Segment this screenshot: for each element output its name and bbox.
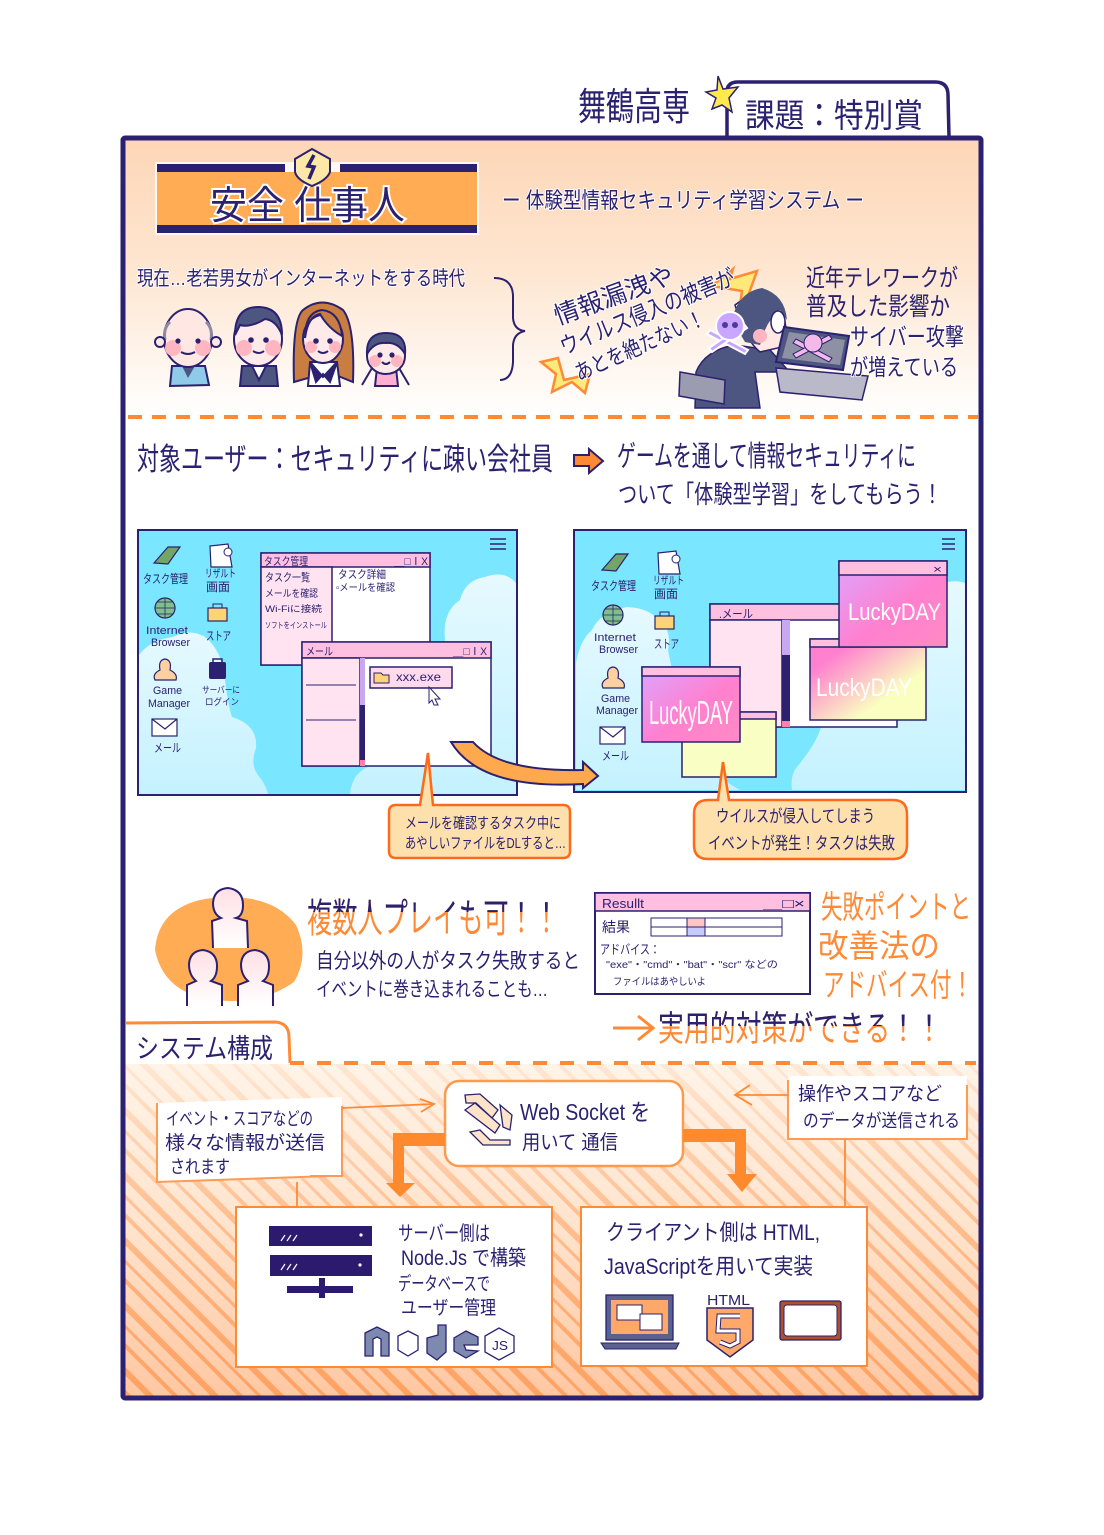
server text: サーバー側は xyxy=(398,1222,490,1245)
desktop icons xyxy=(591,551,684,763)
tab: award xyxy=(706,76,949,137)
body xyxy=(695,345,786,408)
desktop icons xyxy=(143,544,240,755)
panel: screen 1 xyxy=(138,530,517,795)
window: result: アドバイス： xyxy=(600,942,660,957)
main frame border xyxy=(123,138,981,1398)
popup: lucky day yellow xyxy=(682,712,776,777)
desktop icons: メール xyxy=(602,749,629,763)
window: mail: xxx.exe xyxy=(396,670,441,684)
arrow: websocket to server xyxy=(386,1133,445,1197)
title banner xyxy=(155,149,479,235)
icon: cursor xyxy=(429,687,440,705)
window: mail xyxy=(302,642,491,766)
text: multiplayer detail: 自分以外の人がタスク失敗すると xyxy=(316,950,580,973)
icon: bag xyxy=(655,616,674,629)
people illustration xyxy=(155,302,409,386)
callout 2: ウイルスが侵入してしまう xyxy=(716,807,875,826)
box: client note: 操作やスコアなど xyxy=(798,1083,942,1105)
box: event note: されます xyxy=(170,1157,230,1177)
arrow: to goal xyxy=(574,449,603,473)
desktop icons: Game xyxy=(153,685,182,697)
box: event note xyxy=(157,1097,342,1182)
popup: lucky day 3 xyxy=(642,667,740,742)
text: telework: 普及した影響か xyxy=(806,293,950,321)
icon: shield xyxy=(295,149,330,186)
icon: spark bottom xyxy=(541,358,590,393)
icon: server login xyxy=(209,662,226,679)
window: result: Resullt xyxy=(602,896,644,911)
child xyxy=(362,333,409,386)
text: goal: ゲームを通して情報セキュリティに xyxy=(617,440,916,473)
skull on screen xyxy=(793,334,832,362)
icon: spark top xyxy=(712,269,757,305)
window: task manager: ＿□ⅠX xyxy=(394,556,429,568)
desktop icons: Manager xyxy=(148,698,190,710)
icon: websocket xyxy=(465,1094,512,1145)
window: mail: .メール xyxy=(719,607,753,621)
heading: advice: 失敗ポイントと xyxy=(821,889,971,925)
menu icon xyxy=(490,539,506,549)
popup: lucky day 1: × xyxy=(933,564,942,576)
popup: lucky day 1: LuckyDAY xyxy=(848,599,941,626)
desktop icons: リザルト xyxy=(653,574,684,587)
header: school name: 舞鶴高専 xyxy=(578,87,690,129)
server text: データベースで xyxy=(398,1273,490,1295)
window: result: ファイルはあやしいよ xyxy=(613,976,706,988)
window: result xyxy=(595,893,810,994)
desktop icons: Browser xyxy=(599,644,638,656)
head xyxy=(735,295,786,352)
window: mail: メール xyxy=(306,646,333,658)
slanted warning text xyxy=(550,262,739,386)
icon: globe xyxy=(155,598,175,618)
callout 2 xyxy=(694,762,907,859)
illustration: hacker xyxy=(679,269,868,408)
divider dashed xyxy=(290,1061,976,1065)
popup: lucky day 1 xyxy=(839,561,947,647)
client text xyxy=(604,1220,820,1279)
old man xyxy=(155,309,221,386)
box: client note: のデータが送信される xyxy=(803,1111,960,1131)
text: multiplayer detail xyxy=(316,950,580,1001)
arrow: client note to websocket xyxy=(735,1085,788,1105)
heading: multiplayer xyxy=(308,898,548,936)
arrow: websocket to client xyxy=(683,1129,757,1192)
server text: Node.Js で構築 xyxy=(401,1247,526,1270)
icon: book xyxy=(154,547,180,564)
icon: mail xyxy=(152,719,177,736)
popup: lucky day 2 xyxy=(810,639,926,720)
box: websocket: 用いて 通信 xyxy=(522,1131,618,1154)
section tab: system xyxy=(126,1022,290,1064)
text: target users: 対象ユーザー：セキュリティに疎い会社員 xyxy=(137,442,553,477)
text: telework: サイバー攻撃 xyxy=(850,324,964,351)
menu icon xyxy=(942,539,955,549)
desktop icons: Internet xyxy=(146,625,188,637)
window: result: 結果 xyxy=(602,919,630,935)
panel: screen 2 xyxy=(574,530,966,792)
icon: user xyxy=(154,659,176,680)
callout 1: メールを確認するタスク中に xyxy=(405,815,561,832)
desktop icons: メール xyxy=(154,741,181,755)
window: task manager: Wi-Fiに接続 xyxy=(265,603,322,614)
brace xyxy=(494,278,525,380)
window: task manager: ソフトをインストール xyxy=(265,621,327,630)
desktop icons: 画面 xyxy=(206,580,230,594)
heading: advice: 改善法の xyxy=(818,928,940,964)
purple skull xyxy=(707,312,748,354)
section tab: system: システム構成 xyxy=(136,1034,273,1064)
client text: クライアント側は HTML, xyxy=(606,1220,820,1245)
icon: server xyxy=(269,1226,372,1298)
window: mail: ＿□ⅠX xyxy=(453,646,488,658)
callout 1: あやしいファイルをDLすると… xyxy=(405,835,566,852)
divider dashed xyxy=(128,415,978,419)
icon: globe xyxy=(603,605,623,625)
arrow: event note to websocket xyxy=(342,1099,434,1112)
window: task manager: メールを確認 xyxy=(265,587,318,600)
text: goal: ついて「体験型学習」をしてもらう！ xyxy=(618,481,942,509)
back laptop xyxy=(679,372,725,404)
desktop icons: ログイン xyxy=(205,696,239,707)
heading: practical measures xyxy=(613,1011,931,1044)
desktop icons: タスク管理 xyxy=(591,578,636,593)
subtitle: ー 体験型情報セキュリティ学習システム ー xyxy=(502,188,864,213)
icon: bag xyxy=(208,608,227,621)
connector: note to server xyxy=(296,1182,298,1212)
text: telework: 近年テレワークが xyxy=(806,265,958,292)
icon: multiplayer group xyxy=(155,888,303,1006)
server text xyxy=(398,1222,526,1319)
icon: document xyxy=(658,551,680,574)
heading: multiplayer: 複数人プレイも可！！ xyxy=(307,897,559,941)
arrow: screen transition xyxy=(451,742,598,788)
window: task manager: ▫メールを確認 xyxy=(336,581,395,594)
icon: document xyxy=(210,544,232,567)
server text: ユーザー管理 xyxy=(401,1297,496,1319)
laptop xyxy=(776,368,868,400)
text: internet age: 現在…老若男女がインターネットをする時代 xyxy=(137,267,465,290)
icon: book xyxy=(602,554,628,571)
popup: lucky day 3: LuckyDAY xyxy=(649,694,733,731)
heading: advice: アドバイス付！ xyxy=(823,967,973,1003)
client text: JavaScriptを用いて実装 xyxy=(604,1254,813,1279)
icon: html5 xyxy=(707,1292,753,1357)
desktop icons: Browser xyxy=(151,637,190,649)
desktop icons: Internet xyxy=(594,632,636,644)
panel: system background xyxy=(123,1064,981,1398)
icon: user xyxy=(602,667,624,688)
desktop icons: サーバーに xyxy=(202,685,240,695)
box: event note: 様々な情報が送信 xyxy=(165,1132,325,1154)
callout 1 xyxy=(389,753,570,858)
desktop icons: リザルト xyxy=(205,567,236,580)
girl xyxy=(294,302,353,386)
box: client xyxy=(581,1207,867,1366)
popup: lucky day 2: LuckyDAY xyxy=(816,674,912,702)
window: result: "exe"・"cmd"・"bat"・"scr" などの xyxy=(606,959,778,971)
heading: advice xyxy=(818,889,973,1003)
window: result: ＿□× xyxy=(763,896,805,911)
text: telework xyxy=(806,265,964,380)
connector: note to client xyxy=(844,1139,846,1207)
box: server xyxy=(236,1207,552,1367)
desktop icons: ストア xyxy=(206,629,231,643)
man in suit xyxy=(234,307,282,386)
heading: multiplayer: 複数人プレイも可！！ xyxy=(307,897,559,941)
window: task manager: タスク詳細 xyxy=(338,567,386,581)
text: telework: が増えている xyxy=(850,354,958,380)
icon: star xyxy=(706,76,738,112)
slanted warning text: 情報漏洩や xyxy=(550,262,678,331)
title text: 安全 仕事人 xyxy=(210,185,405,228)
main frame background top xyxy=(123,138,981,418)
text: multiplayer detail: イベントに巻き込まれることも… xyxy=(316,978,548,1001)
desktop icons: タスク管理 xyxy=(143,571,188,586)
slanted warning text: あとを絶たない！ xyxy=(571,306,709,386)
icon: tablet xyxy=(780,1301,841,1340)
tab: award: 課題：特別賞 xyxy=(745,97,923,134)
icon: html5: HTML xyxy=(707,1292,750,1309)
text: goal xyxy=(617,440,942,509)
heading: practical measures: 実用的対策ができる！！ xyxy=(658,1010,942,1049)
icon: node logo xyxy=(365,1325,514,1360)
box: websocket: Web Socket を xyxy=(520,1099,650,1125)
window: task manager: タスク管理 xyxy=(264,554,308,568)
window: task manager xyxy=(261,553,430,665)
icon: node logo: JS xyxy=(492,1338,508,1353)
window: task manager: タスク一覧 xyxy=(265,571,310,584)
icon: laptop xyxy=(601,1295,679,1349)
desktop icons: Manager xyxy=(596,705,638,717)
window: mail xyxy=(710,604,897,727)
box: event note: イベント・スコアなどの xyxy=(166,1109,313,1129)
box: websocket xyxy=(445,1081,683,1166)
desktop icons: ストア xyxy=(654,637,679,651)
icon: mail xyxy=(600,727,625,744)
slanted warning text: ウイルス侵入の被害が xyxy=(556,264,739,360)
heading: practical measures: 実用的対策ができる！！ xyxy=(658,1010,942,1049)
callout 2: イベントが発生！タスクは失敗 xyxy=(708,834,895,853)
box: client note xyxy=(788,1076,967,1139)
desktop icons: Game xyxy=(601,693,630,705)
desktop icons: 画面 xyxy=(654,587,678,601)
